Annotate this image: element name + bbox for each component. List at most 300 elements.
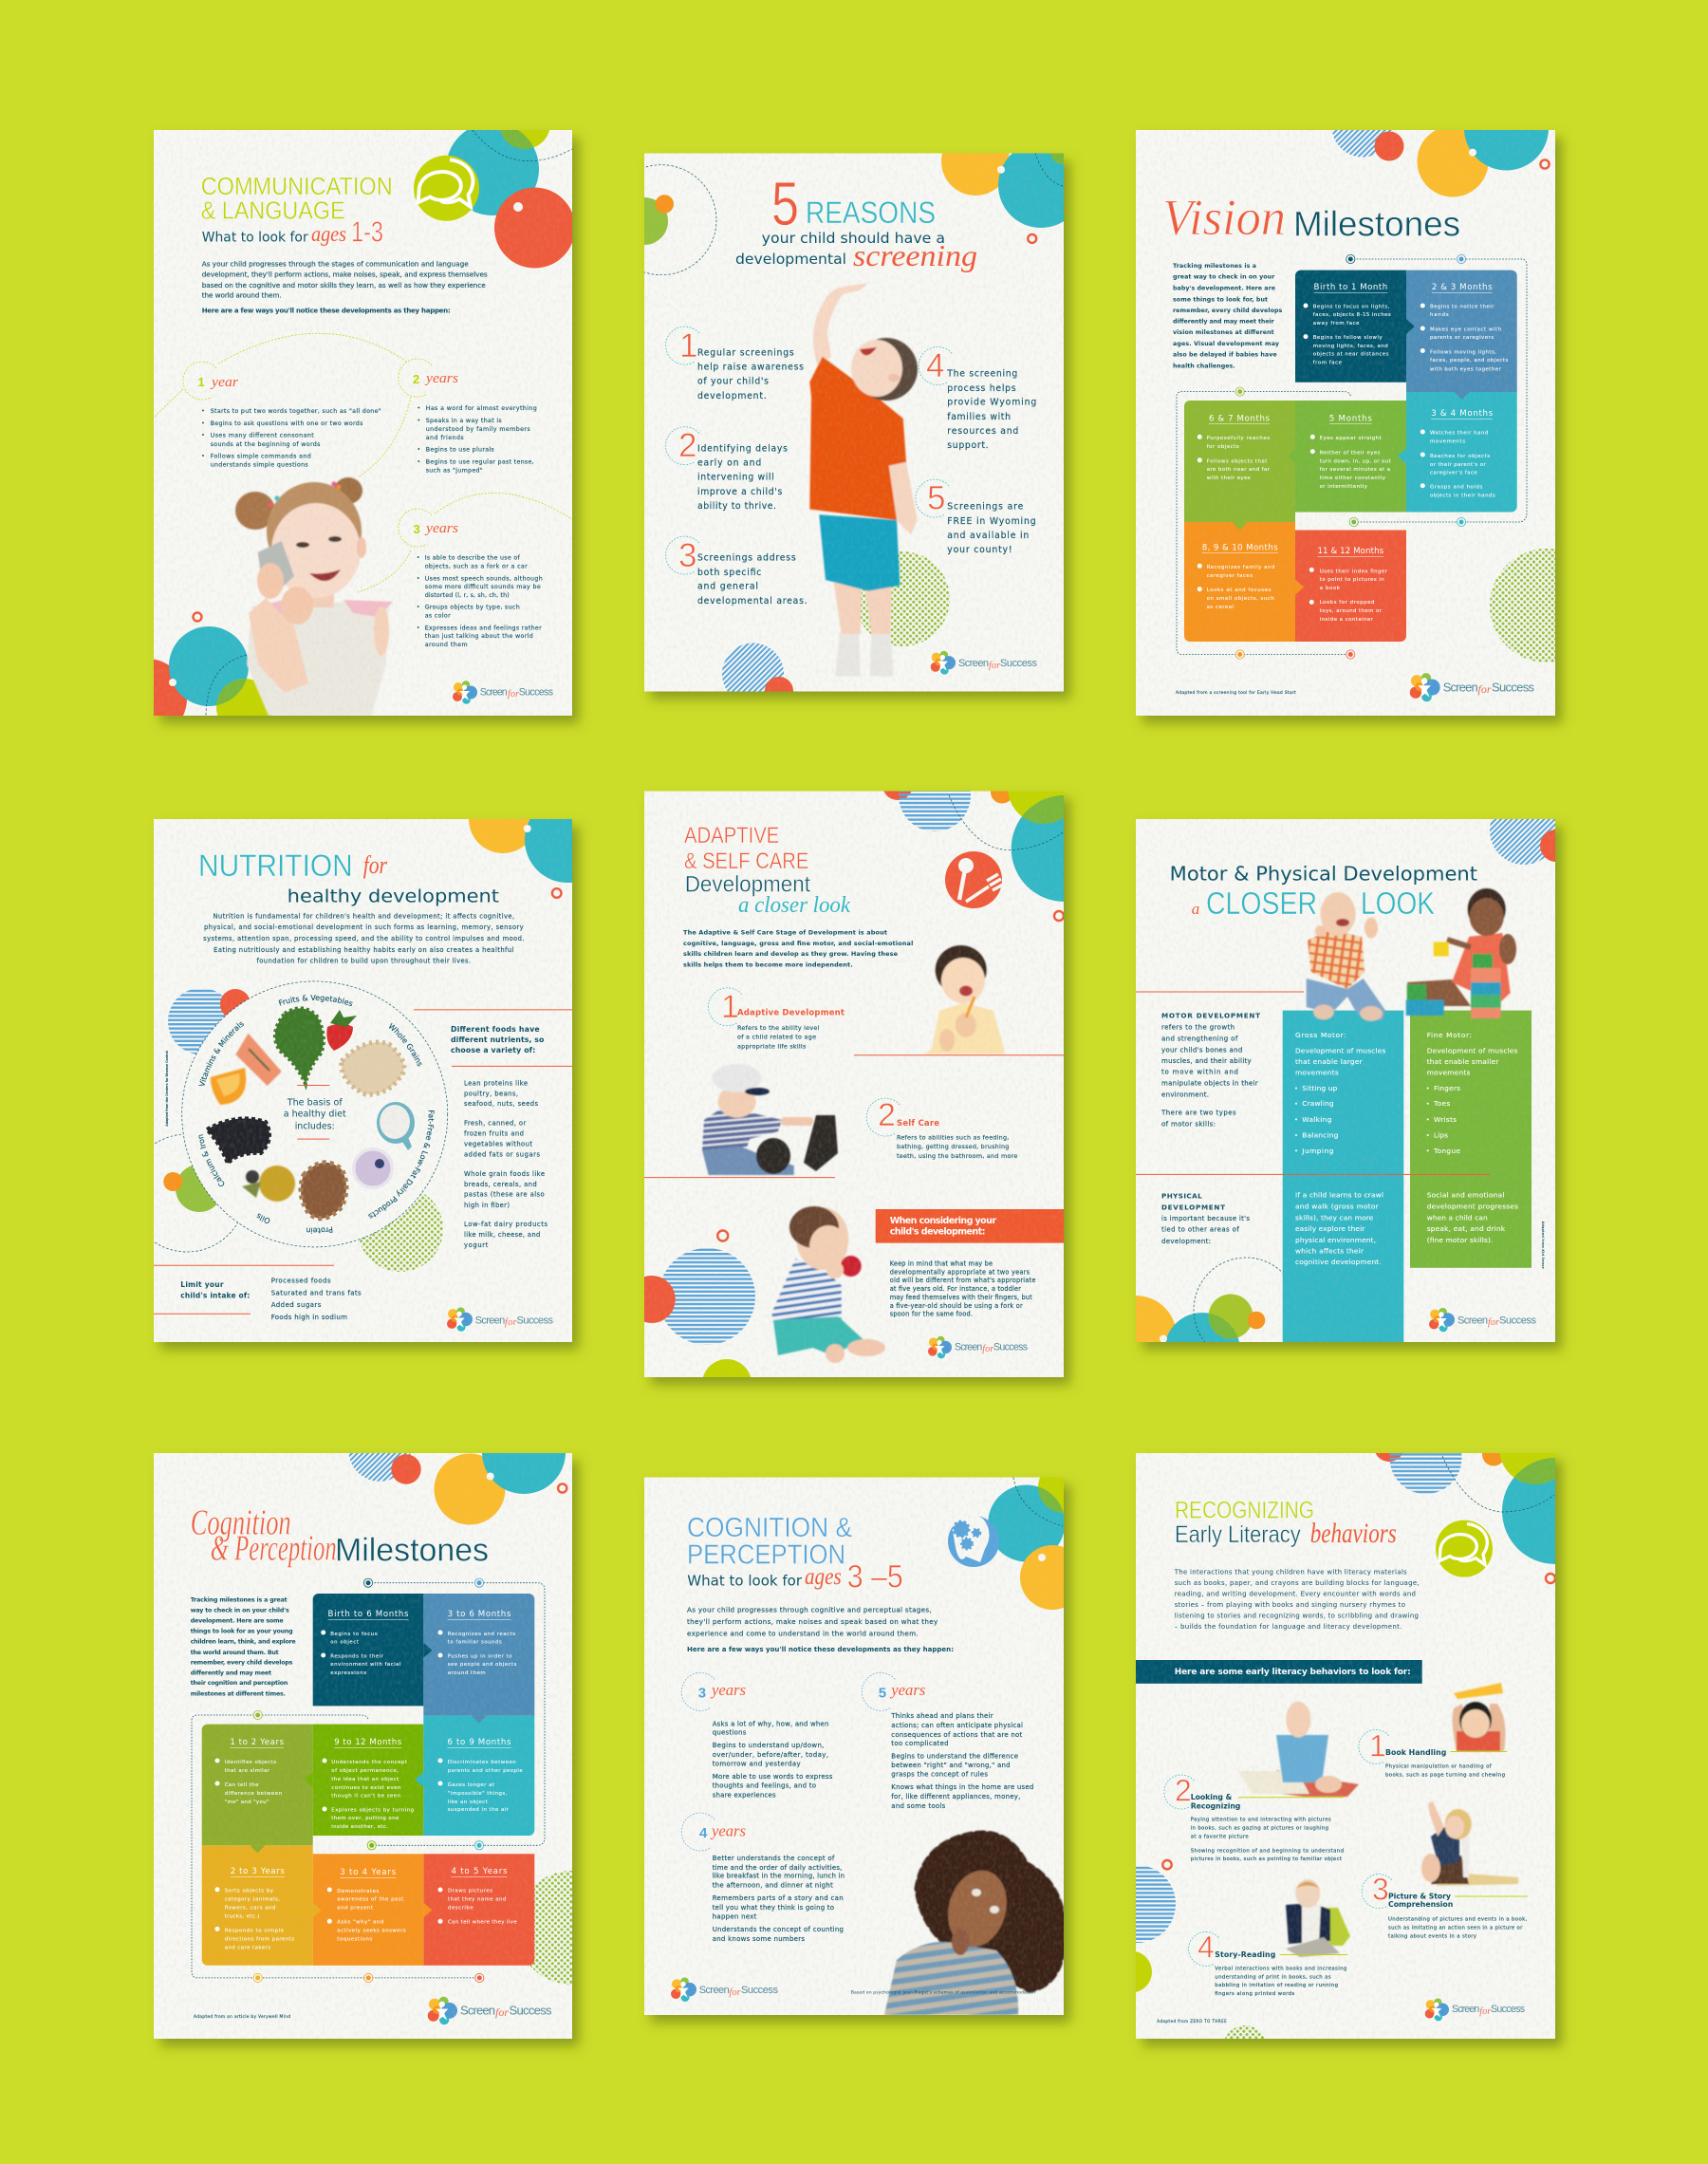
card: birth to 1 month (1295, 270, 1415, 382)
left text: motor development: muscles, and their ability (1161, 1057, 1252, 1065)
rotated credit: Adapted from the Centers for Disease Control (165, 1051, 169, 1127)
card: birth to 6 months: expressions (330, 1670, 366, 1676)
panel: vision milestones (1136, 130, 1568, 729)
card: 1 to 2 years (202, 1725, 313, 1853)
diet wheel (181, 981, 448, 1247)
panel: nutrition (154, 819, 585, 1355)
section: looking and recognizing: at a favorite picture (1191, 1835, 1249, 1840)
card: 2 and 3 months: with both eyes together (1430, 366, 1501, 372)
section: 1 year: Uses many different consonant (211, 433, 314, 439)
section: book handling: Book Handling (1385, 1748, 1446, 1757)
decorative circles: vision panel (1332, 130, 1555, 662)
card: 11 and 12 months (1295, 530, 1406, 642)
title: cognition and perception milestones: Cognition (191, 1503, 291, 1543)
title: adaptive and self care: Development (685, 871, 810, 898)
limit intake block: Added sugars (271, 1301, 322, 1309)
section: 4 years: like breakfast in the morning, lunch in (713, 1873, 845, 1880)
card: 2 to 3 years: trucks, etc.) (225, 1914, 259, 1920)
intro text: based on the cognitive and motor skills they learn, as well as how they experience (202, 281, 486, 289)
section: 2 years: Has a word for almost everything (426, 405, 537, 412)
intro text: such as books, paper, and crayons are building blocks for language, (1175, 1579, 1420, 1587)
limit intake block: child's intake of: (180, 1291, 250, 1299)
card: 2 to 3 years: flowers, cars and (225, 1906, 275, 1912)
card: 2 and 3 months: parents or caregivers (1430, 335, 1494, 341)
card: 9 to 12 months: inside another, etc. (331, 1824, 388, 1830)
panel: motor and physical development (1136, 819, 1568, 1355)
footnote: Adapted from ZERO TO THREE (1157, 2019, 1227, 2024)
column: gross motor: If a child learns to crawl (1295, 1190, 1383, 1199)
photo: smiling girl with phone (235, 477, 393, 716)
section: picture and story comprehension (1362, 1872, 1528, 1939)
title: communication and language: What to look for (202, 231, 308, 246)
logo: for (508, 689, 519, 700)
card: 2 and 3 months: Begins to notice their (1430, 304, 1494, 309)
photo: boy measuring height (809, 283, 918, 677)
card: 11 and 12 months: Looks for dropped (1320, 600, 1374, 606)
food: orange slices (211, 1068, 246, 1105)
card: 9 to 12 months: the idea that an object (331, 1777, 399, 1782)
section: self care: bathing, getting dressed, brushing (897, 1143, 1009, 1150)
card: 11 and 12 months: Uses their index finger (1320, 569, 1388, 574)
wheel labels: Whole Grains (389, 1023, 421, 1067)
title: recognizing early literacy: RECOGNIZING (1175, 1498, 1314, 1524)
section: 4 years: Better understands the concept of (713, 1855, 835, 1862)
section: 4 years: Remembers parts of a story and can (713, 1894, 844, 1902)
section: 1 year: understands simple questions (211, 461, 308, 468)
section: self care: Self Care (897, 1119, 939, 1129)
logo (453, 681, 553, 704)
icon: speech bubbles (414, 156, 479, 221)
card: 1 to 2 years: Identifies objects (225, 1760, 276, 1765)
intro text: their cognition and perception (191, 1680, 288, 1687)
section: 3 years: Asks a lot of why, how, and when (713, 1720, 828, 1727)
wheel labels: Fat-Free & Low-Fat Dairy Products (368, 1110, 435, 1219)
column: fine motor: movements (1427, 1068, 1471, 1076)
column: fine motor: Lips (1434, 1131, 1448, 1139)
reason 4: process helps (947, 383, 1016, 394)
reason 4 (919, 346, 1036, 451)
intro text: As your child progresses through the stages of communication and language (202, 259, 469, 268)
card: 11 and 12 months: 11 & 12 Months (1317, 547, 1384, 556)
section: 3 years: Is able to describe the use of (425, 555, 520, 562)
section: 4 years: time and the order of daily activities, (713, 1864, 842, 1872)
logo (1410, 673, 1535, 701)
intro text: Here are a few ways you'll notice these developments as they happen: (202, 308, 451, 315)
intro text: physical, and social-emotional development in such forms as learning, memory, sensory (204, 923, 524, 931)
title: nutrition: NUTRITION (198, 849, 353, 883)
reason 3: both specific (697, 568, 761, 578)
card: 11 and 12 months: a book (1320, 586, 1341, 591)
reason 5: 5 (927, 480, 945, 516)
section: 5 years: consequences of actions that are not (891, 1731, 1023, 1739)
section: 4 years: happen next (713, 1913, 757, 1921)
section: 4 years: Understands the concept of counting (713, 1926, 844, 1933)
column: gross motor: and walk (gross motor (1295, 1203, 1380, 1211)
title: communication and language: & LANGUAGE (201, 196, 345, 225)
section: story reading: babbling in imitation of reading or running (1215, 1983, 1338, 1988)
card: 9 to 12 months: of object permanence, (331, 1768, 399, 1774)
card: 3 and 4 months: or their parent's or (1430, 462, 1486, 468)
card: 2 to 3 years: 2 to 3 Years (231, 1867, 285, 1876)
wheel labels: Fruits & Vegetables (279, 995, 353, 1006)
title: motor and physical: a (1192, 900, 1199, 918)
callout banner: when considering: When considering your (890, 1216, 996, 1226)
column: gross motor: physical environment, (1295, 1236, 1376, 1244)
callout text (890, 1260, 1035, 1317)
reason 1: Regular screenings (697, 347, 794, 358)
card: 6 and 7 months: Follows objects that (1207, 458, 1267, 464)
photo: thinking girl (884, 1835, 1063, 2015)
logo: Screen (1452, 2004, 1479, 2015)
section: 3 years: over/under, before/after, today, (713, 1751, 828, 1759)
side text: different foods: poultry, beans, (464, 1090, 518, 1097)
card: 6 and 7 months: are both near and far (1207, 467, 1271, 473)
card: 3 to 6 months: 3 to 6 Months (448, 1610, 511, 1619)
reason 2: ability to thrive. (697, 501, 776, 512)
section: looking and recognizing: Recognizing (1191, 1802, 1240, 1811)
section: 1 year: Starts to put two words together, such as "all done" (211, 408, 381, 415)
section: self care: teeth, using the bathroom, and more (897, 1152, 1017, 1160)
decorative circles: cognition panel (988, 1462, 1089, 1610)
decorative circles: communication panel (154, 130, 572, 716)
column: fine motor: that enable smaller (1427, 1057, 1499, 1066)
section: 5 years: too complicated (891, 1740, 949, 1747)
footnote: Based on psychologist Jean Piaget's schemas of assimilation and accommodation (851, 1989, 1035, 1995)
title: vision milestones: Milestones (1293, 205, 1460, 243)
reason 4: resources and (947, 426, 1018, 437)
title: nutrition: healthy development (288, 886, 499, 907)
intro text: experience and come to understand in the world around them. (687, 1629, 919, 1637)
section: 2 years: years (424, 371, 458, 386)
side text: different foods: yogurt (464, 1241, 489, 1249)
title: nutrition (198, 849, 499, 907)
column: gross motor: that enable larger (1295, 1057, 1364, 1066)
card: 9 to 12 months: them over, putting one (331, 1816, 399, 1821)
title: motor and physical: LOOK (1361, 886, 1435, 921)
section: book handling (1359, 1729, 1507, 1778)
card: 11 and 12 months: to point to pictures in (1320, 577, 1384, 583)
column: gross motor: easily explore their (1295, 1224, 1365, 1233)
card: birth to 6 months: environment with facial (330, 1662, 400, 1668)
intro text (202, 259, 488, 315)
reason 4: families with (947, 412, 1011, 422)
section: story reading: Verbal interactions with books and increasing (1215, 1966, 1346, 1971)
section: 5 years: grasps the concept of rules (891, 1771, 988, 1779)
title: communication and language: ages (311, 222, 346, 246)
intro text: some things to look for, but (1173, 296, 1268, 303)
title: nutrition: for (363, 851, 388, 879)
limit intake block: Limit your (180, 1280, 224, 1289)
card: 3 and 4 months: Watches their hand (1430, 430, 1488, 436)
card: 8, 9 and 10 months: as cereal (1207, 605, 1234, 610)
section: adaptive development: appropriate life skills (737, 1042, 807, 1050)
card: birth to 6 months: Responds to their (330, 1653, 384, 1659)
callout text: at five years old. For instance, a toddler (890, 1285, 1021, 1293)
card: 9 to 12 months: though it can't be seen (331, 1793, 400, 1799)
callout banner: when considering (876, 1209, 1064, 1243)
section: 5 years: 5 (879, 1685, 886, 1701)
logo: Success (1499, 1315, 1537, 1327)
side text: different foods (414, 1010, 572, 1249)
icon: head with gears (948, 1514, 999, 1567)
intro text: ages. Visual development may (1173, 341, 1279, 347)
logo (931, 651, 1038, 675)
intro text: differently and may meet (191, 1670, 271, 1676)
title: cognition and perception: COGNITION & (687, 1513, 852, 1543)
title: motor and physical: CLOSER (1206, 886, 1317, 921)
photo: girl pointing with book (1421, 1801, 1518, 1886)
card: birth to 1 month: Birth to 1 Month (1314, 283, 1387, 292)
footnote: Adapted from an article by Verywell Mind (194, 2014, 290, 2020)
reason 3: developmental areas. (697, 596, 808, 606)
section: 3 years: questions (713, 1729, 747, 1737)
section: 5 years: for, like different appliances, money, (891, 1793, 1020, 1800)
column: gross motor: Walking (1302, 1115, 1332, 1124)
column: fine motor: Tongue (1433, 1147, 1460, 1155)
card: 1 to 2 years: Can tell the (225, 1782, 259, 1788)
decorative circles: reasons panel (644, 154, 1064, 691)
section: 5 years: years (889, 1681, 926, 1699)
intro text: foundation for children to build upon throughout their lives. (256, 957, 471, 964)
title: cognition and perception milestones: & Perception (211, 1529, 337, 1569)
panel: cognition milestones (154, 1453, 585, 2052)
logo: Screen (958, 658, 989, 669)
section: story reading: 4 (1197, 1931, 1215, 1965)
reason 3: and general (697, 582, 758, 592)
section: 1 year: Begins to ask questions with one or two words (211, 420, 362, 427)
banner: early literacy behaviors (1136, 1660, 1422, 1684)
title: cognition and perception (687, 1513, 903, 1595)
section: 4 years: tell you what they think is going to (713, 1904, 834, 1912)
section: 5 years (862, 1672, 1033, 1810)
section: looking and recognizing (1164, 1773, 1344, 1862)
wheel labels: Calcium & Iron (198, 1134, 224, 1186)
panel: early literacy (1098, 1412, 1608, 2069)
logo: for (729, 1987, 741, 1998)
card: 3 to 4 years: toquestions (337, 1936, 372, 1942)
card: 4 to 5 years: describe (448, 1906, 473, 1912)
card: 2 to 3 years: Sorts objects by (225, 1889, 274, 1894)
card: birth to 6 months: Begins to focus (330, 1632, 378, 1637)
card: 6 to 9 months (415, 1716, 534, 1836)
title: cognition and perception: 3 –5 (847, 1558, 903, 1595)
banner: early literacy behaviors: Here are some early literacy behaviors to look for: (1175, 1668, 1411, 1677)
side text: different foods: seafood, nuts, seeds (464, 1100, 538, 1108)
logo (1425, 1998, 1525, 2021)
rotated credit: Adapted from Kid Sense (1541, 1222, 1545, 1269)
intro text: they'll perform actions, make noises and speak based on what they (687, 1617, 938, 1626)
card: 2 and 3 months: Makes eye contact with (1430, 326, 1501, 332)
callout text: may feed themselves with their fingers, but (890, 1294, 1032, 1301)
column: gross motor: skills), they can more (1295, 1213, 1374, 1222)
intro text: skills helps them to become more independent. (683, 961, 853, 968)
intro text: great way to check in on your (1173, 274, 1275, 281)
reason 2: Identifying delays (697, 443, 788, 454)
intro text: – builds the foundation for language and literacy development. (1175, 1623, 1402, 1631)
title: motor and physical (1170, 863, 1477, 921)
intro text (191, 1597, 296, 1697)
timeline markers (253, 1578, 484, 1982)
reason 2: intervening will (697, 473, 774, 482)
limit intake block (154, 1265, 362, 1321)
intro text: development, they'll perform actions, make noises, speak, and express themselves (202, 270, 488, 279)
card: 3 to 4 years: and present (337, 1906, 373, 1912)
intro text: development. Here are some (191, 1618, 284, 1625)
intro text: vision milestones at different (1173, 329, 1274, 336)
column: gross motor: Jumping (1301, 1147, 1334, 1155)
card: 5 months: for several minutes at a (1320, 467, 1390, 473)
reason 1: help raise awareness (697, 363, 804, 373)
title: 5 reasons: developmental (735, 251, 846, 268)
logo: for (505, 1317, 517, 1328)
panel: adaptive and self care (644, 792, 1076, 1391)
column: gross motor: cognitive development. (1295, 1258, 1382, 1266)
logo: Success (516, 1315, 554, 1327)
card: 3 and 4 months: 3 & 4 Months (1431, 409, 1494, 419)
wheel labels: Vitamins & Minerals (198, 1021, 244, 1086)
left text: motor development: to move within and (1161, 1069, 1238, 1076)
section: book handling: Physical manipulation or handling of (1385, 1763, 1492, 1769)
title: adaptive and self care (684, 823, 850, 918)
intro text: remember, every child develops (191, 1659, 293, 1666)
card: 3 and 4 months: caregiver's face (1430, 471, 1477, 476)
icon: spoon and fork (945, 851, 1003, 908)
intro text: Tracking milestones is a great (191, 1597, 288, 1604)
card: 5 months: turn down, in, up, or out (1320, 458, 1391, 464)
section: adaptive development: of a child related to age (737, 1034, 816, 1041)
intro text (687, 1606, 954, 1653)
intro text: reading, and writing development. Every encounter with words and (1175, 1591, 1416, 1598)
card: 3 to 6 months: Recognizes and reacts (448, 1632, 515, 1637)
section: 2 years: and friends (426, 435, 464, 441)
intro text: also be delayed if babies have (1173, 352, 1277, 359)
logo: Screen (460, 2004, 495, 2018)
card: 2 and 3 months: hands (1430, 312, 1449, 318)
card: 3 to 4 years: awareness of the past (337, 1897, 403, 1903)
column: fine motor: when a child can (1427, 1213, 1488, 1222)
card: 3 to 6 months: around them (448, 1670, 486, 1676)
side text: different foods: Fresh, canned, or (464, 1120, 527, 1128)
title: recognizing early literacy: Early Literacy (1175, 1521, 1301, 1548)
wheel center text: The basis of (287, 1097, 343, 1109)
card: birth to 1 month: Begins to follow slowly (1313, 335, 1383, 341)
card: 6 and 7 months: 6 & 7 Months (1209, 414, 1271, 423)
side text: different foods: vegetables without (464, 1140, 532, 1147)
section: 3 years: Expresses ideas and feelings rather (425, 625, 542, 631)
column: gross motor: movements (1295, 1068, 1339, 1076)
card: 3 to 6 months: see people and objects (448, 1662, 517, 1668)
section: self care: Refers to abilities such as feeding, (897, 1133, 1009, 1141)
card: birth to 1 month: from face (1313, 361, 1343, 366)
section: story reading: understanding of print in books, such as (1215, 1974, 1331, 1980)
food: salmon (235, 1034, 282, 1086)
column: fine motor: (fine motor skills). (1427, 1236, 1493, 1244)
orange dot (163, 1172, 182, 1191)
card: 6 and 7 months (1184, 401, 1295, 530)
section: picture and story comprehension: Picture & Story (1388, 1893, 1451, 1901)
section: 4 years: 4 (699, 1825, 708, 1841)
card: 8, 9 and 10 months: Looks at and focuses (1207, 588, 1272, 593)
wheel labels (198, 995, 435, 1234)
left text: motor development: MOTOR DEVELOPMENT (1161, 1012, 1260, 1020)
section: 1 year: 1 (197, 375, 205, 389)
food: olive oil (242, 1166, 295, 1202)
column: fine motor: development progresses (1427, 1203, 1518, 1211)
section: 3 years: objects, such as a fork or a car (425, 563, 528, 569)
logo (1429, 1308, 1537, 1332)
title: cognition and perception: PERCEPTION (687, 1540, 845, 1571)
left text: motor development: manipulate objects in their (1161, 1079, 1258, 1087)
column: fine motor: Fine Motor: (1427, 1031, 1472, 1039)
logo (671, 1977, 778, 2002)
intro text: As your child progresses through cognitive and perceptual stages, (687, 1606, 932, 1614)
card: 9 to 12 months: continues to exist even (331, 1785, 400, 1791)
column: fine motor: speak, eat, and drink (1427, 1224, 1506, 1233)
card: birth to 6 months: Birth to 6 Months (328, 1610, 409, 1619)
decorative circles: nutrition panel (155, 819, 572, 1272)
section: story reading: Story-Reading (1215, 1950, 1275, 1959)
intro text: differently and may meet their (1173, 319, 1275, 325)
left text: physical development: PHYSICAL (1161, 1192, 1202, 1201)
title: communication and language (201, 172, 393, 249)
side text: different foods: Different foods have (451, 1025, 540, 1034)
card: 2 to 3 years: category (animals, (225, 1897, 280, 1903)
intro text (1173, 263, 1283, 369)
logo: for (1478, 682, 1492, 696)
decorative circles: adaptive panel (644, 792, 1064, 1377)
card: 6 to 9 months: like an object (448, 1800, 488, 1805)
section: book handling: 1 (1369, 1729, 1386, 1763)
side text: different foods: choose a variety of: (451, 1046, 535, 1054)
section: 1 year: sounds at the beginning of words (211, 441, 320, 448)
section: 3 years (399, 509, 543, 648)
section: 5 years: actions; can often anticipate physical (891, 1722, 1023, 1729)
side text: different foods: added fats or sugars (464, 1150, 540, 1158)
footnote: Adapted from a screening tool for Early Head Start (1176, 690, 1296, 696)
section: 3 years: than just talking about the world (425, 633, 533, 640)
section: 3 years: share experiences (713, 1791, 776, 1799)
card: 8, 9 and 10 months (1184, 522, 1304, 642)
section: picture and story comprehension: Understanding of pictures and events in a book, (1388, 1917, 1528, 1923)
intro text: the world around them. But (191, 1650, 279, 1656)
logo: for (1479, 2006, 1491, 2017)
card: 6 to 9 months: suspended in the air (448, 1807, 510, 1813)
title: communication and language: 1-3 (351, 215, 383, 249)
left text: physical development: tied to other areas of (1161, 1226, 1239, 1234)
logo: for (1488, 1317, 1499, 1328)
card: 2 and 3 months: 2 & 3 Months (1432, 283, 1493, 292)
callout text: a five-year-old should be using a fork or (890, 1302, 1023, 1310)
intro text: listening to stories and recognizing words, to scribbling and drawing (1175, 1612, 1419, 1619)
card: 8, 9 and 10 months: Recognizes family and (1207, 565, 1274, 570)
section: 5 years: Thinks ahead and plans their (890, 1712, 993, 1720)
card: 2 and 3 months: faces, people, and objects (1430, 358, 1508, 364)
card: 9 to 12 months (305, 1725, 423, 1836)
card: 2 and 3 months (1406, 270, 1517, 400)
intro text (1174, 1569, 1420, 1631)
card: 2 to 3 years: directions from parents (225, 1936, 294, 1942)
section: 1 year (183, 362, 381, 468)
title: cognition and perception: What to look for (687, 1572, 803, 1589)
logo: Screen (699, 1985, 730, 1996)
column: fine motor: Fingers (1434, 1084, 1460, 1092)
section: 3 years: around them (425, 642, 468, 648)
section: 4 years: the afternoon, and dinner at night (713, 1882, 833, 1890)
title: vision milestones: Vision (1162, 189, 1286, 246)
left text: motor development: your child's bones and (1161, 1046, 1242, 1054)
food: yogurt (352, 1147, 394, 1189)
reason 3: 3 (678, 537, 696, 574)
